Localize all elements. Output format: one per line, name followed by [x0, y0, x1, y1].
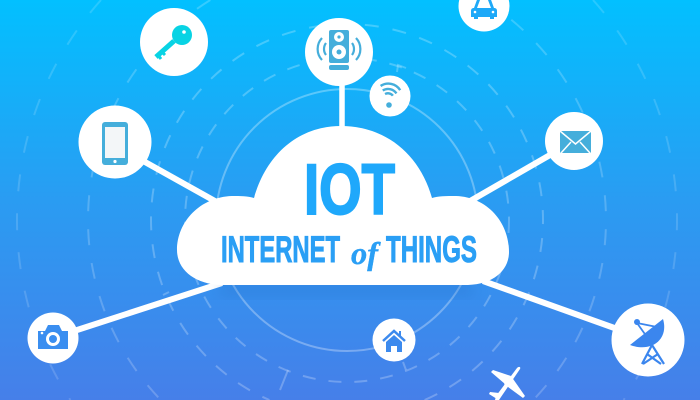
subtitle: Internet of Things: THINGS: [386, 229, 477, 270]
icon: key: [140, 8, 208, 76]
icon: smartphone: [78, 106, 152, 178]
icon: speaker: [305, 18, 373, 86]
subtitle: Internet of Things: of: [351, 235, 381, 271]
connector lines: [74, 82, 620, 331]
icon: envelope: [545, 112, 603, 170]
icon: satellite dish: [612, 304, 684, 376]
icon: house: [372, 318, 416, 362]
cloud shadow: [215, 283, 478, 296]
cloud: [177, 126, 509, 285]
icon: camera: [28, 312, 78, 364]
icon: wifi: [370, 76, 410, 116]
icon: car: [458, 0, 510, 32]
title: IOT: IOT: [304, 151, 395, 230]
subtitle: Internet of Things: INTERNET: [221, 229, 340, 270]
icon: airplane: [489, 367, 525, 400]
